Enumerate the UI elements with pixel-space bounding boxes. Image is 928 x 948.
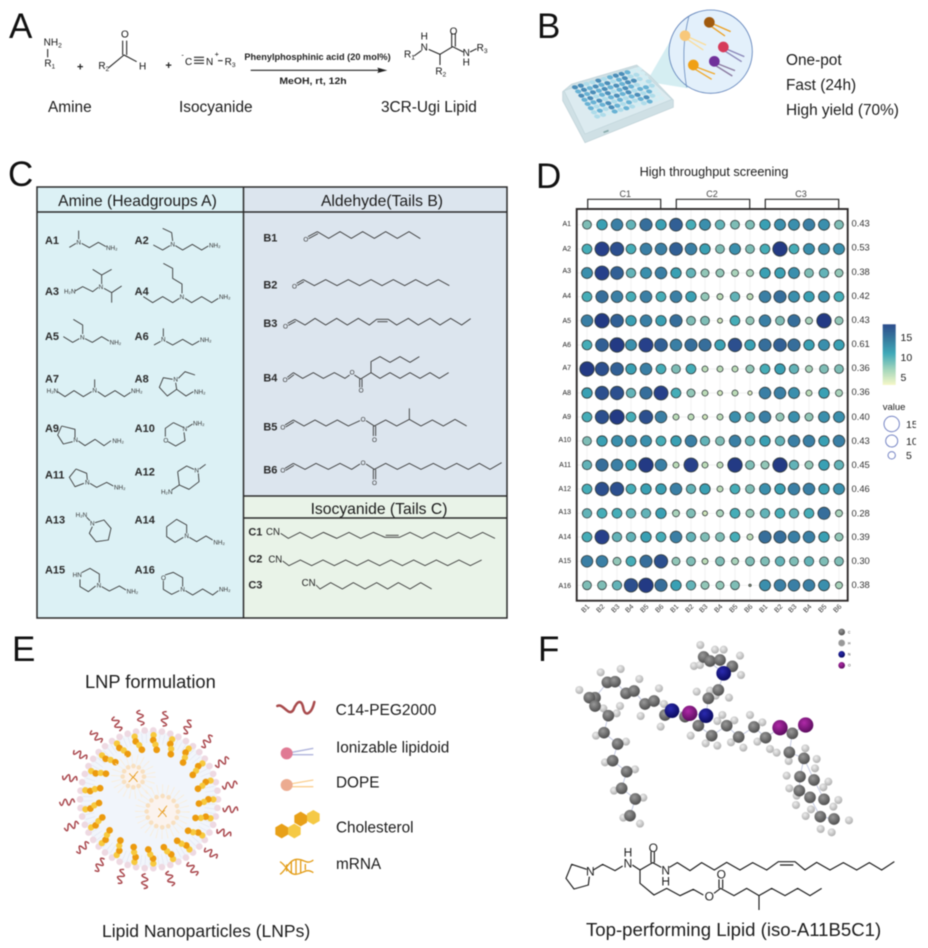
row A10 (583, 435, 845, 447)
label ionizable lipidoid: Ionizable lipidoid (336, 740, 449, 757)
A14: NH₂ (213, 539, 225, 546)
A14: N (184, 533, 189, 540)
inner vesicle with mRNA 2 (140, 789, 185, 834)
row labels: A5 (562, 318, 571, 325)
A15: HN (73, 572, 82, 579)
C2: CN (268, 555, 282, 566)
A10 (135, 420, 205, 446)
row labels: A8 (562, 390, 571, 397)
A16 (135, 564, 231, 595)
row labels: A14 (559, 534, 571, 541)
right side values: 0.43 (852, 314, 870, 325)
product structure: R (404, 49, 411, 60)
letter B: B (537, 7, 560, 46)
label product: 3CR-Ugi Lipid (381, 99, 477, 116)
row A7 (580, 362, 843, 376)
icon: cholesterol (275, 810, 320, 838)
isocyanide heading: Isocyanide (Tails C) (311, 501, 447, 518)
table frame (37, 187, 507, 618)
column labels: B2 (684, 603, 696, 614)
colour bar legend: 15 (900, 332, 912, 344)
caption: Top-performing Lipid (iso-A11B5C1) (586, 919, 881, 940)
product structure: 1 (411, 54, 415, 61)
right side values: 0.39 (852, 531, 870, 542)
right side values: 0.30 (852, 555, 870, 566)
B3: O (283, 324, 288, 331)
amine structure: 1 (52, 64, 56, 71)
A7 (45, 374, 143, 397)
B5: O (372, 437, 377, 444)
A3: N (99, 284, 104, 291)
A12: N (194, 468, 199, 475)
nitrogen atoms (665, 666, 731, 723)
C3: C3 (248, 579, 262, 591)
A10: A10 (135, 423, 155, 435)
B2: O (292, 283, 297, 290)
group brackets: C2 (706, 189, 718, 199)
isocyanide structure: C (185, 57, 192, 68)
aldehyde structure: O (121, 29, 129, 40)
row labels: A4 (562, 293, 571, 300)
panel B: one-pot synthesis (537, 7, 899, 143)
column labels: B2 (773, 603, 785, 614)
column labels: B5 (817, 603, 829, 614)
atom legend: N (848, 653, 851, 657)
feature list (786, 52, 899, 119)
atom legend: C (848, 630, 851, 634)
column labels: B2 (595, 603, 607, 614)
B4: O (283, 377, 288, 384)
product structure: H (463, 58, 470, 69)
row labels: A3 (562, 268, 571, 275)
2D skeletal structure: O (717, 868, 726, 882)
isocyanide column (244, 496, 507, 618)
2D skeletal structure: N (586, 865, 595, 879)
A5: N (80, 334, 85, 341)
row A15 (581, 555, 843, 568)
A1: NH₂ (106, 245, 118, 252)
product structure (404, 26, 488, 79)
A6: NH₂ (200, 337, 212, 344)
colour bar legend (883, 324, 912, 385)
atom legend: H (848, 641, 851, 645)
group brackets: C1 (620, 189, 631, 199)
row A2 (582, 242, 844, 256)
2D skeletal structure: O (705, 890, 714, 904)
column labels: B6 (743, 603, 755, 614)
A2 (135, 228, 221, 250)
column labels (580, 603, 844, 614)
C3 (248, 578, 432, 591)
A16: N (180, 586, 185, 593)
A11: NH₂ (114, 485, 126, 492)
2D skeletal structure (566, 841, 894, 910)
A8 (135, 372, 206, 396)
panel D: bubble heatmap (559, 165, 928, 614)
colour bar legend: 5 (900, 372, 906, 384)
A7: A7 (45, 374, 59, 386)
A7: H₂N (47, 388, 59, 395)
A11: N (85, 479, 90, 486)
A13 (45, 512, 111, 542)
row A6 (582, 338, 844, 352)
amine heading: Amine (Headgroups A) (58, 193, 217, 210)
A7: N (92, 387, 97, 394)
column labels: B1 (758, 603, 770, 614)
column labels: B1 (580, 603, 592, 614)
A10: NH₂ (193, 420, 205, 427)
right side values: 0.28 (852, 508, 870, 518)
size legend (883, 402, 928, 462)
2D skeletal structure: H (661, 874, 670, 888)
A15: N (97, 583, 102, 590)
A2: N (170, 241, 175, 248)
A9: A9 (45, 423, 59, 435)
A4 (135, 263, 231, 303)
A14 (135, 514, 225, 546)
B1: B1 (263, 233, 277, 245)
panel C: building blocks table (37, 187, 507, 618)
label DOPE: DOPE (336, 774, 379, 791)
A11: A11 (45, 469, 65, 481)
A5: NH₂ (110, 339, 122, 346)
A6: N (161, 337, 166, 344)
product structure: R (435, 67, 443, 78)
B4: B4 (263, 373, 278, 385)
A12 (135, 464, 206, 496)
panel F: top-performing lipid (538, 629, 894, 940)
isocyanide structure: 3 (232, 62, 236, 69)
row labels: A6 (562, 342, 571, 349)
size legend: 15 (906, 419, 918, 431)
B6: B6 (263, 464, 277, 476)
2D skeletal structure: H (624, 846, 632, 860)
letter A: A (9, 7, 33, 46)
row A9 (582, 410, 844, 424)
right side values: 0.45 (852, 459, 870, 470)
isocyanide structure: - (181, 50, 184, 59)
hydrogen atoms (575, 641, 853, 836)
row labels: A2 (562, 246, 571, 253)
plus sign: + (165, 60, 172, 72)
atom legend: O (848, 664, 851, 668)
A16: O (161, 575, 166, 582)
row A4 (582, 291, 844, 303)
reaction conditions: MeOH, rt, 12h (279, 76, 347, 86)
A3 (45, 269, 122, 303)
A1: A1 (45, 235, 59, 247)
A13: N (90, 520, 95, 527)
well plate (563, 65, 673, 143)
product structure: 3 (484, 48, 488, 55)
feature list: One-pot (786, 52, 842, 69)
letter E: E (12, 630, 35, 669)
A4: N (180, 294, 185, 301)
B6: O (361, 460, 366, 467)
isocyanide structure: N (206, 57, 213, 68)
B6: O (280, 467, 285, 474)
row labels: A13 (559, 509, 571, 516)
amine structure: R (44, 59, 52, 70)
A1 (45, 231, 118, 252)
A13: A13 (45, 514, 65, 526)
plot frame (577, 209, 848, 601)
2D skeletal structure: O (649, 841, 658, 855)
A16: NH₂ (219, 586, 231, 593)
right side values: 0.40 (852, 411, 870, 422)
column labels: B3 (610, 603, 622, 614)
size legend: value (883, 402, 905, 413)
product structure: H (421, 31, 428, 42)
molecular bonds (595, 657, 834, 819)
aldehyde heading: Aldehyde(Tails B) (321, 193, 443, 210)
right side values (852, 218, 870, 590)
A3: H₂N (64, 289, 76, 296)
row labels: A12 (559, 486, 571, 493)
icon: DOPE (281, 779, 313, 791)
C2: C2 (248, 553, 262, 565)
A6 (135, 328, 212, 345)
2D skeletal structure: N (624, 856, 632, 870)
row A12 (582, 482, 844, 496)
A11 (45, 469, 126, 492)
right side values: 0.46 (852, 483, 870, 494)
right side values: 0.61 (852, 338, 870, 349)
A5 (45, 319, 122, 346)
column labels: B6 (654, 603, 666, 614)
feature list: High yield (70%) (786, 102, 899, 119)
A6: A6 (135, 331, 149, 343)
column labels: B6 (832, 603, 844, 614)
label Amine: Amine (48, 99, 92, 116)
A7: NH₂ (131, 388, 143, 395)
label mRNA: mRNA (336, 856, 382, 873)
size legend: 5 (906, 450, 912, 462)
product structure: O (450, 26, 458, 37)
row A16 (583, 578, 842, 592)
B1: O (303, 236, 308, 243)
aldehyde structure: R (98, 61, 106, 72)
row labels: A7 (562, 365, 571, 372)
reaction conditions: Phenylphosphinic acid (20 mol%) (244, 52, 391, 62)
group brackets: C3 (795, 189, 807, 199)
product structure: 2 (443, 72, 447, 79)
B4: O (359, 387, 364, 394)
B3 (263, 318, 471, 331)
A1: N (76, 239, 81, 246)
aldehyde structure: 2 (106, 66, 110, 73)
A9: N (73, 437, 78, 444)
lipid tails (88, 738, 210, 861)
subtitle: LNP formulation (85, 671, 216, 692)
A14: A14 (135, 514, 156, 526)
A2: A2 (135, 235, 149, 247)
A8: A8 (135, 374, 149, 386)
C1: CN (266, 527, 280, 538)
A12: H₂N (161, 489, 173, 496)
A3: A3 (45, 286, 59, 298)
C3: CN (302, 578, 316, 589)
B4: O (350, 370, 355, 377)
column labels: B4 (624, 603, 636, 614)
reaction conditions (244, 52, 391, 86)
C1: C1 (248, 527, 262, 539)
column labels: B1 (669, 603, 681, 614)
cholesterol clusters (81, 732, 217, 867)
right side values: 0.43 (852, 218, 870, 228)
row labels: A16 (559, 583, 571, 590)
icon: PEG chain (277, 702, 314, 713)
label cholesterol: Cholesterol (336, 819, 414, 836)
chart title: High throughput screening (640, 165, 788, 179)
product structure: N (421, 43, 428, 54)
nanoparticle illustration (60, 710, 238, 889)
amine structure (44, 38, 62, 71)
aldehyde structure (98, 29, 146, 73)
B5 (263, 408, 467, 444)
row A3 (582, 266, 843, 280)
isocyanide structure (181, 50, 236, 69)
plus sign: + (77, 61, 83, 73)
feature list: Fast (24h) (786, 77, 856, 94)
right side values: 0.42 (852, 290, 870, 301)
A15: NH₂ (127, 589, 139, 596)
letter C: C (8, 155, 33, 194)
A8: N (173, 377, 178, 384)
right side values: 0.36 (852, 362, 870, 373)
row A11 (582, 458, 844, 472)
A2: NH₂ (209, 242, 221, 249)
PEG chains (60, 710, 238, 889)
product structure: R (477, 43, 484, 54)
group brackets (588, 189, 839, 209)
plate and magnified lipids illustration (563, 10, 752, 143)
A9: NH₂ (112, 438, 124, 445)
label PEG: C14-PEG2000 (336, 702, 436, 719)
component legend (275, 702, 449, 874)
A13: H₂N (76, 512, 88, 519)
right side values: 0.43 (852, 435, 870, 446)
A15 (45, 564, 139, 596)
label Isocyanide: Isocyanide (179, 99, 253, 116)
row labels: A15 (559, 558, 571, 565)
size legend: 10 (906, 436, 918, 448)
right side values: 0.53 (852, 242, 870, 252)
colour bar legend: 10 (900, 352, 912, 364)
2D skeletal structure: N (661, 864, 670, 878)
row labels: A10 (559, 437, 571, 444)
A4: NH₂ (219, 294, 231, 301)
C1 (248, 527, 495, 539)
B4 (263, 357, 449, 394)
row A5 (581, 314, 843, 328)
column labels: B4 (802, 603, 814, 614)
3D molecule model (575, 629, 853, 836)
B2: B2 (263, 279, 277, 291)
B5: O (361, 417, 366, 424)
B5: O (280, 425, 285, 432)
amine structure: NH (44, 38, 58, 49)
carbon atoms (583, 651, 840, 825)
A5: A5 (45, 331, 59, 343)
magnified lipid circle (669, 10, 752, 93)
row labels: A9 (562, 414, 571, 421)
icon: ionizable lipidoid (281, 747, 313, 759)
aldehyde structure: H (139, 61, 146, 72)
inner vesicle with mRNA 1 (116, 759, 151, 794)
B2 (263, 279, 449, 291)
right side values: 0.36 (852, 386, 870, 397)
column labels: B4 (713, 603, 725, 614)
amine column (37, 187, 244, 618)
B5: B5 (263, 421, 277, 433)
B3: B3 (263, 318, 277, 330)
A16: A16 (135, 564, 155, 576)
row labels: A11 (559, 462, 571, 469)
row A13 (582, 507, 842, 519)
atom legend (838, 629, 851, 669)
row A8 (582, 386, 842, 400)
isocyanide structure: R (225, 57, 232, 68)
A12: A12 (135, 466, 155, 478)
A10: O (163, 437, 168, 444)
column labels: B3 (698, 603, 710, 614)
panel A: Ugi reaction scheme (9, 7, 488, 116)
zoom beam (647, 38, 688, 88)
icon: mRNA (280, 859, 313, 874)
A10: N (183, 426, 188, 433)
letter D: D (536, 157, 561, 196)
letter F: F (538, 630, 559, 669)
reaction formula (44, 26, 488, 86)
aldehyde column (244, 187, 507, 496)
oxygen atoms (682, 706, 813, 735)
column labels: B3 (787, 603, 799, 614)
panel E: LNP formulation (12, 630, 449, 941)
row labels: A1 (562, 221, 571, 228)
amine structure: 2 (58, 43, 62, 50)
right side values: 0.38 (852, 579, 870, 590)
A15: A15 (45, 564, 65, 576)
column labels: B5 (639, 603, 651, 614)
B6: O (372, 480, 377, 487)
row A14 (582, 530, 843, 544)
right side values: 0.38 (852, 266, 870, 277)
C2 (248, 553, 482, 566)
A8: NH₂ (194, 389, 206, 396)
isocyanide structure: + (215, 50, 219, 59)
A9 (45, 423, 124, 446)
A4: A4 (135, 286, 150, 298)
product structure: N (463, 48, 470, 59)
row A1 (583, 218, 843, 231)
column labels: B5 (728, 603, 740, 614)
particle core (81, 731, 217, 868)
B1 (263, 232, 420, 245)
row labels (559, 221, 571, 590)
lipid shell beads (80, 730, 218, 868)
B6 (263, 460, 502, 487)
caption: Lipid Nanoparticles (LNPs) (102, 921, 310, 941)
